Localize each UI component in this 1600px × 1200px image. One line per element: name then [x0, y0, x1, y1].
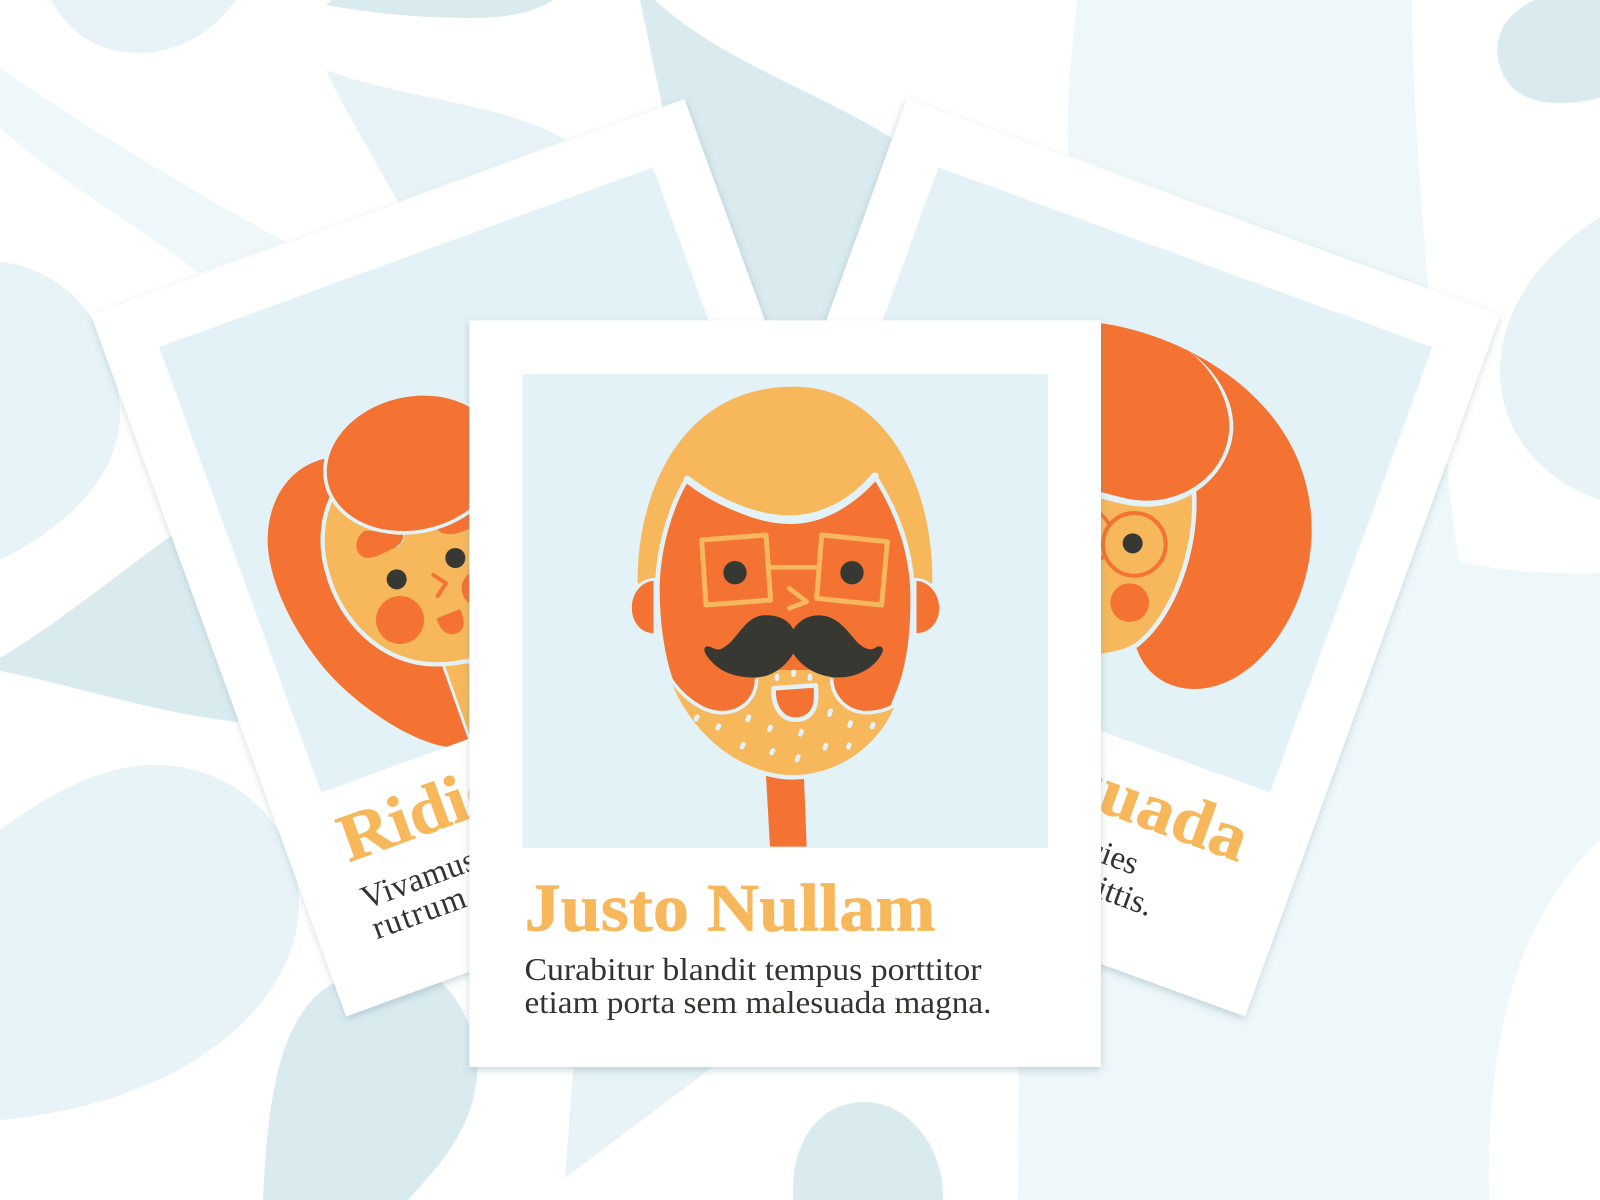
panel: left polaroid card [90, 99, 768, 1020]
right card paper [652, 99, 1500, 1016]
nose [789, 588, 807, 608]
panel: right polaroid card [824, 100, 1502, 1021]
left portrait: woman with orange hair [268, 396, 470, 747]
center card photo background [522, 374, 1048, 848]
left card body text: rutrum [367, 879, 472, 947]
left card body text: faucibus dolor auctor. [473, 774, 763, 908]
center card body text: Curabitur blandit tempus porttitor [524, 951, 982, 987]
right card heading: Tortor Malesuada [712, 617, 1259, 877]
glasses [702, 535, 887, 605]
left ear [630, 579, 655, 635]
left card body text: Vivamus sagittis lacus vel augue [356, 731, 785, 917]
mouth [774, 685, 816, 720]
eyes [723, 561, 864, 584]
right ear [915, 579, 941, 635]
left card photo background [159, 167, 815, 793]
right card photo background [776, 167, 1432, 793]
hair [638, 387, 932, 627]
center card body text: etiam porta sem malesuada magna. [524, 984, 992, 1020]
beard [670, 670, 895, 775]
left card heading: Ridiculus Mollis [329, 635, 826, 877]
panel: center polaroid card [469, 320, 1101, 1067]
fringe outline [687, 476, 875, 519]
center card paper [469, 320, 1101, 1067]
right card body text: vehicula ut id elit sagittis. [826, 774, 1158, 924]
center portrait: man with moustache and glasses [630, 387, 941, 847]
right portrait: woman with glasses and orange hair [1101, 323, 1312, 689]
neck [766, 776, 807, 847]
left card paper [91, 99, 940, 1016]
moustache [704, 615, 883, 677]
right card body text: Nullam id dolor nibh ultricies [762, 714, 1143, 882]
center card heading: Justo Nullam [524, 870, 936, 946]
face [657, 477, 913, 777]
